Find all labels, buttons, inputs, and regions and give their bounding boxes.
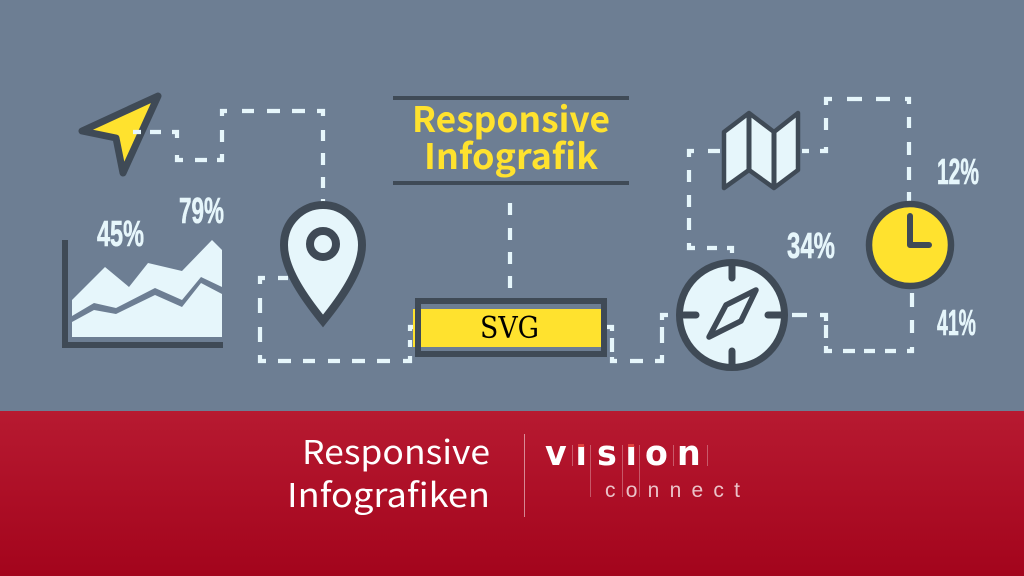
icon: folded map: [724, 113, 798, 188]
SVG box: SVG: [480, 311, 539, 346]
title block: Responsive: [412, 92, 610, 143]
icon: compass: [680, 262, 784, 368]
title block: Infografik: [424, 129, 598, 180]
logo: vision connect: connect: [605, 479, 740, 502]
dashed connector: pin to SVG box: [260, 278, 416, 361]
footer title: Infografiken: [287, 469, 490, 517]
dashed connector: arrow to pin: [133, 111, 323, 202]
footer band: [0, 411, 1024, 576]
dashed connector: compass to clock: [792, 293, 912, 351]
label: 45%: 45%: [97, 213, 144, 254]
footer title: [287, 426, 490, 517]
icon: map pin: [284, 205, 362, 321]
label: 41%: 41%: [937, 302, 976, 343]
footer title: Responsive: [302, 426, 490, 474]
title block: [393, 92, 629, 185]
label: 34%: 34%: [787, 225, 835, 266]
SVG box: [413, 301, 604, 354]
dashed connector: map to clock: [802, 99, 909, 201]
icon: navigation arrow: [82, 96, 158, 173]
dashed connector: title to SVG box: [508, 203, 512, 288]
dashed connector: compass to map: [689, 151, 732, 253]
logo: vision connect: [545, 433, 740, 502]
logo: vision connect: vısıon: [545, 433, 701, 474]
area chart: [65, 240, 223, 345]
icon: clock: [869, 204, 951, 286]
label: 79%: 79%: [179, 190, 224, 231]
footer divider: [524, 434, 525, 517]
label: 12%: 12%: [937, 151, 979, 192]
dashed connector: SVG box to compass: [607, 315, 668, 361]
